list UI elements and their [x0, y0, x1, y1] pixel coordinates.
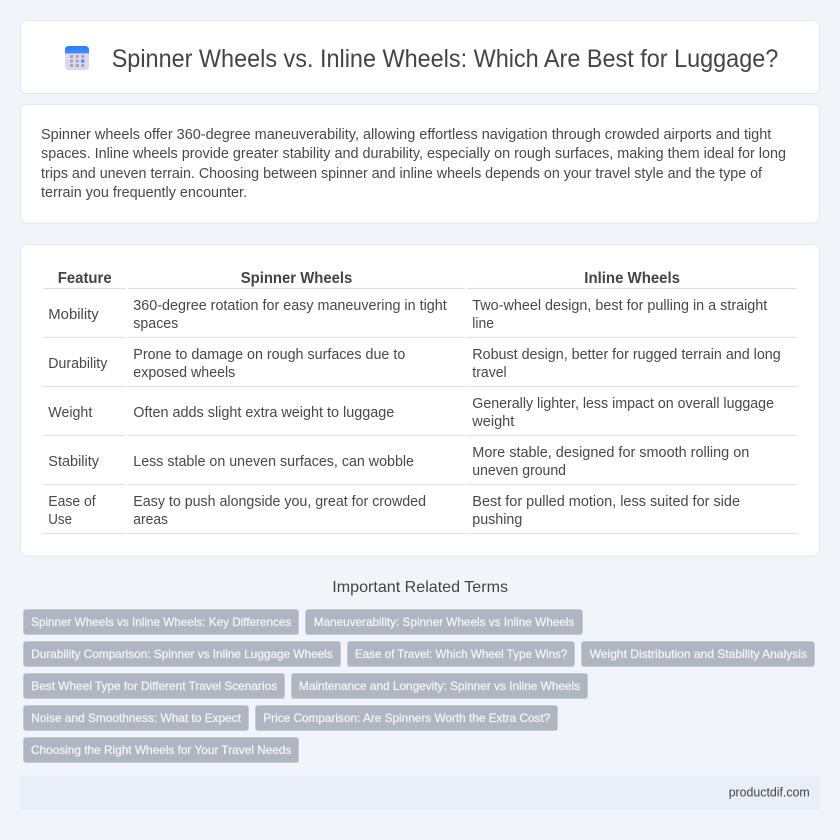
- table row: stability: Less stable on uneven surfaces, can wobble: [133, 454, 414, 470]
- tag: [24, 674, 284, 698]
- tag: [24, 610, 298, 634]
- table row: mobility: Mobility: [48, 307, 100, 323]
- tag list: related terms: [24, 610, 814, 762]
- table row: durability: Robust design, better for rugged terrain and long: [472, 347, 781, 363]
- text block: intro paragraph: [41, 127, 786, 201]
- table row: stability: [43, 445, 797, 484]
- tag: Best Wheel Type for Different Travel Scenarios: [31, 679, 277, 693]
- table row: ease of use: Best for pulled motion, less suited for side: [472, 494, 740, 510]
- tag: [24, 642, 340, 666]
- table row: stability: Stability: [48, 454, 100, 470]
- footer source text: productdif.com: [729, 786, 810, 800]
- table row: mobility: [43, 298, 797, 338]
- table row: durability: [43, 347, 797, 386]
- tag: Weight Distribution and Stability Analysis: [590, 647, 807, 661]
- table row: ease of use: [43, 494, 797, 534]
- table row: durability: Durability: [48, 356, 108, 372]
- table row: durability: Prone to damage on rough surfaces due to: [133, 347, 405, 363]
- tag: [306, 610, 582, 634]
- panel: title header: [20, 20, 820, 94]
- table row: stability: More stable, designed for smooth rolling on: [472, 445, 749, 461]
- text block: intro paragraph: Spinner wheels offer 360-degree maneuverability, allowing effortless navigation through crowded airports and tight: [41, 127, 771, 143]
- panel: comparison table: [20, 244, 820, 556]
- tag: [24, 706, 248, 730]
- table row: ease of use: Easy to push alongside you, great for crowded: [133, 494, 426, 510]
- table row: mobility: 360-degree rotation for easy maneuvering in tight: [133, 298, 447, 314]
- table row: mobility: Two-wheel design, best for pulling in a straight: [472, 298, 767, 314]
- table row: durability: travel: [472, 365, 507, 381]
- tag: Maintenance and Longevity: Spinner vs Inline Wheels: [299, 679, 580, 693]
- table row: mobility: spaces: [133, 316, 178, 332]
- footer bar: [20, 776, 820, 810]
- table header row: Feature: [58, 270, 112, 287]
- text block: intro paragraph: trips and uneven terrain. Choosing between spinner and inline wheels depends on your travel style and the type of: [41, 166, 763, 182]
- tag: [256, 706, 558, 730]
- tag: Price Comparison: Are Spinners Worth the Extra Cost?: [263, 711, 551, 725]
- table row: ease of use: Ease of: [48, 494, 97, 510]
- table row: weight: [43, 396, 797, 436]
- tag: Durability Comparison: Spinner vs Inline Luggage Wheels: [31, 647, 333, 661]
- table row: ease of use: pushing: [472, 512, 522, 528]
- text block: intro paragraph: spaces. Inline wheels provide greater stability and durability, especially on rough surfaces, making them ideal for long: [41, 146, 786, 162]
- table header row: [43, 270, 797, 288]
- tag: [348, 642, 574, 666]
- table header row: Spinner Wheels: [241, 270, 352, 287]
- tag: [292, 674, 588, 698]
- table row: mobility: line: [472, 316, 494, 332]
- table row: weight: Often adds slight extra weight to luggage: [133, 405, 394, 421]
- heading: important related terms: Important Related Terms: [332, 579, 508, 596]
- tag: Noise and Smoothness: What to Expect: [31, 711, 242, 725]
- icon: calendar: [65, 46, 89, 70]
- table header row: Inline Wheels: [584, 270, 680, 287]
- table row: ease of use: areas: [133, 512, 168, 528]
- table row: weight: weight: [471, 414, 514, 430]
- tag: Ease of Travel: Which Wheel Type Wins?: [355, 647, 568, 661]
- panel: introduction: [20, 104, 820, 223]
- tag: [24, 738, 298, 762]
- table row: weight: Weight: [48, 405, 92, 421]
- table row: ease of use: Use: [48, 512, 72, 528]
- tag: Choosing the Right Wheels for Your Travel Needs: [31, 743, 291, 757]
- tag: Spinner Wheels vs Inline Wheels: Key Differences: [31, 615, 291, 629]
- table row: stability: uneven ground: [472, 463, 566, 479]
- tag: Maneuverability: Spinner Wheels vs Inline Wheels: [314, 615, 574, 629]
- tag: [582, 642, 814, 666]
- title: Spinner Wheels vs. Inline Wheels: Which Are Best for Luggage?: [112, 45, 778, 73]
- table row: durability: exposed wheels: [133, 365, 235, 381]
- text block: intro paragraph: terrain you frequently encounter.: [41, 185, 247, 201]
- table row: weight: Generally lighter, less impact on overall luggage: [472, 396, 774, 412]
